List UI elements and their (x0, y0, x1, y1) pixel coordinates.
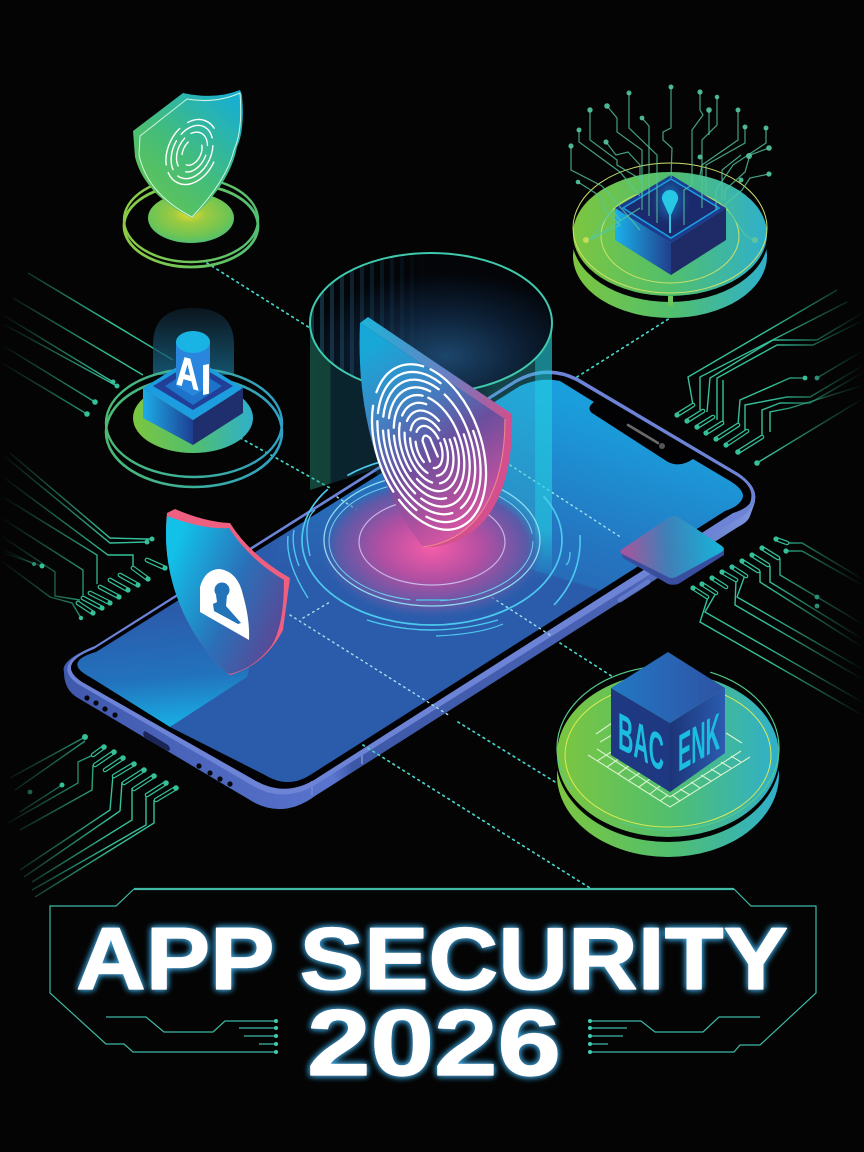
title: APP SECURITY (76, 909, 788, 1008)
title: 2026 (307, 990, 561, 1095)
AI lettering: A (176, 347, 199, 400)
hologram rim (310, 253, 552, 393)
frame circuit: right (588, 1017, 760, 1054)
node: shield with fingerprint on ring (124, 90, 258, 267)
cube (611, 688, 670, 792)
front camera (659, 443, 665, 449)
small fingerprint (156, 111, 228, 193)
node: backend cube: ENK (678, 701, 720, 783)
speaker holes and charging port (84, 695, 233, 787)
node: circuit chip (568, 84, 772, 318)
pink glow and scanning rings (288, 455, 580, 636)
frame circuit: left (106, 1017, 278, 1054)
isometric grid (588, 723, 750, 807)
node: backend cube: BAC (618, 701, 664, 783)
holographic cylinder top (310, 253, 552, 393)
circuit traces: upper right (674, 290, 864, 466)
fingerprint (351, 348, 507, 546)
screen dotted lines (290, 465, 622, 716)
title (76, 909, 788, 1095)
speaker slot (628, 425, 658, 443)
circuit traces: upper left (2, 273, 173, 417)
holographic cylinder body (310, 323, 552, 590)
node: AI chip (106, 308, 282, 487)
screen reflection wedge (77, 538, 280, 727)
smartphone (64, 370, 755, 809)
tilted card chip (620, 516, 724, 585)
circuit traces: lower right (690, 536, 864, 716)
AI halo (153, 308, 234, 375)
node: backend cube (556, 652, 780, 857)
node: AI chip: I (201, 356, 211, 405)
lower dotted connector lines (363, 722, 590, 888)
title frame (50, 889, 816, 1054)
circuit traces: lower left (8, 734, 179, 897)
radiating circuit traces (568, 84, 772, 243)
circuit traces: middle left (0, 453, 168, 620)
phone screen (77, 380, 743, 782)
user icon (200, 569, 249, 640)
lower screen panel (170, 560, 600, 782)
dotted connector lines (207, 263, 670, 677)
blue user shield (166, 509, 290, 675)
chip box (615, 208, 671, 275)
keyhole (658, 182, 682, 233)
central fingerprint shield (351, 317, 512, 547)
